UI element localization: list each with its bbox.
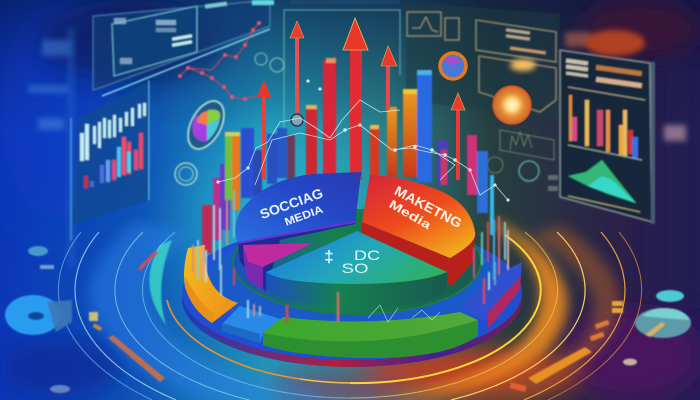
arrow: right of center [381,46,397,110]
text: social media label: MEDIA [283,204,325,229]
chart: thin candlesticks left [193,190,338,322]
chart: base disc [182,224,522,367]
panel: upper left dashboard screen [93,0,274,96]
arrow: far right [451,93,465,180]
chart: vertical bars [569,95,638,159]
slice edge highlight [238,222,355,243]
text: DC SO label [324,247,380,276]
chart: network sketch on green slab [368,305,440,322]
pie side: blue [238,172,361,292]
arrow: tall left with magnifier [290,21,304,126]
arrow: center tallest [343,18,368,180]
slab: green segment [263,312,478,358]
text: DC SO label: DC [354,247,380,263]
slab: yellow segment [184,245,238,323]
panel: lower right gauge area [487,130,558,191]
icon: glow highlight [510,59,536,71]
text: DC SO label: SO [342,260,369,276]
slice: magenta [243,243,313,267]
chart: green area [568,160,636,203]
decorative arc labels left and right [89,252,623,392]
panel: blurred far-left screen [28,28,74,268]
rings: cyan crescent left [149,240,172,325]
panel: center frame behind arrows [284,0,400,130]
chart header lines [566,58,642,88]
icon: ring gauge left [175,53,284,185]
arrow: far left [257,80,271,180]
icon: orange sunburst gauge [493,86,531,124]
slice: marketing media [362,175,475,258]
icon: left blurred donut chart [5,295,72,335]
chart: thin candlesticks right [474,216,508,304]
panel: left bar chart screen [71,80,149,240]
chart: green ring under pie [233,210,481,314]
panel: right bar chart screen [560,50,655,224]
rings: soft blue band left [88,222,320,400]
icon: right blurred pie chart [28,246,691,393]
chart: colored bars [84,133,143,188]
icon: ringed globe [440,53,466,79]
text: marketing media label: Media [387,197,434,232]
pie side: green [266,272,447,307]
pie side: magenta [243,245,263,290]
text: marketing media label: MAKETNG [392,183,464,231]
chart: white network trend lines [216,79,510,202]
blurred upper-right screen [565,30,686,141]
text: DC SO label: ‡ [324,247,334,266]
slab: small blue segment [222,306,293,343]
chart: 3D pie [235,172,475,307]
slice: social media [235,172,361,243]
text: social media label: SOCCIAG [258,185,325,222]
chart: red line trend [178,21,261,101]
icon: small pie chart [181,95,231,155]
slab: right blue segment [460,262,522,329]
bars: background columns [202,58,494,253]
rings: warm orange band right [385,222,620,398]
slice: DC SO [266,231,447,284]
chart: white candlesticks [80,103,146,161]
panel: upper right dashboard screen [406,2,560,120]
pie side: red [362,222,475,286]
rings: radial orbit lines [58,232,642,400]
